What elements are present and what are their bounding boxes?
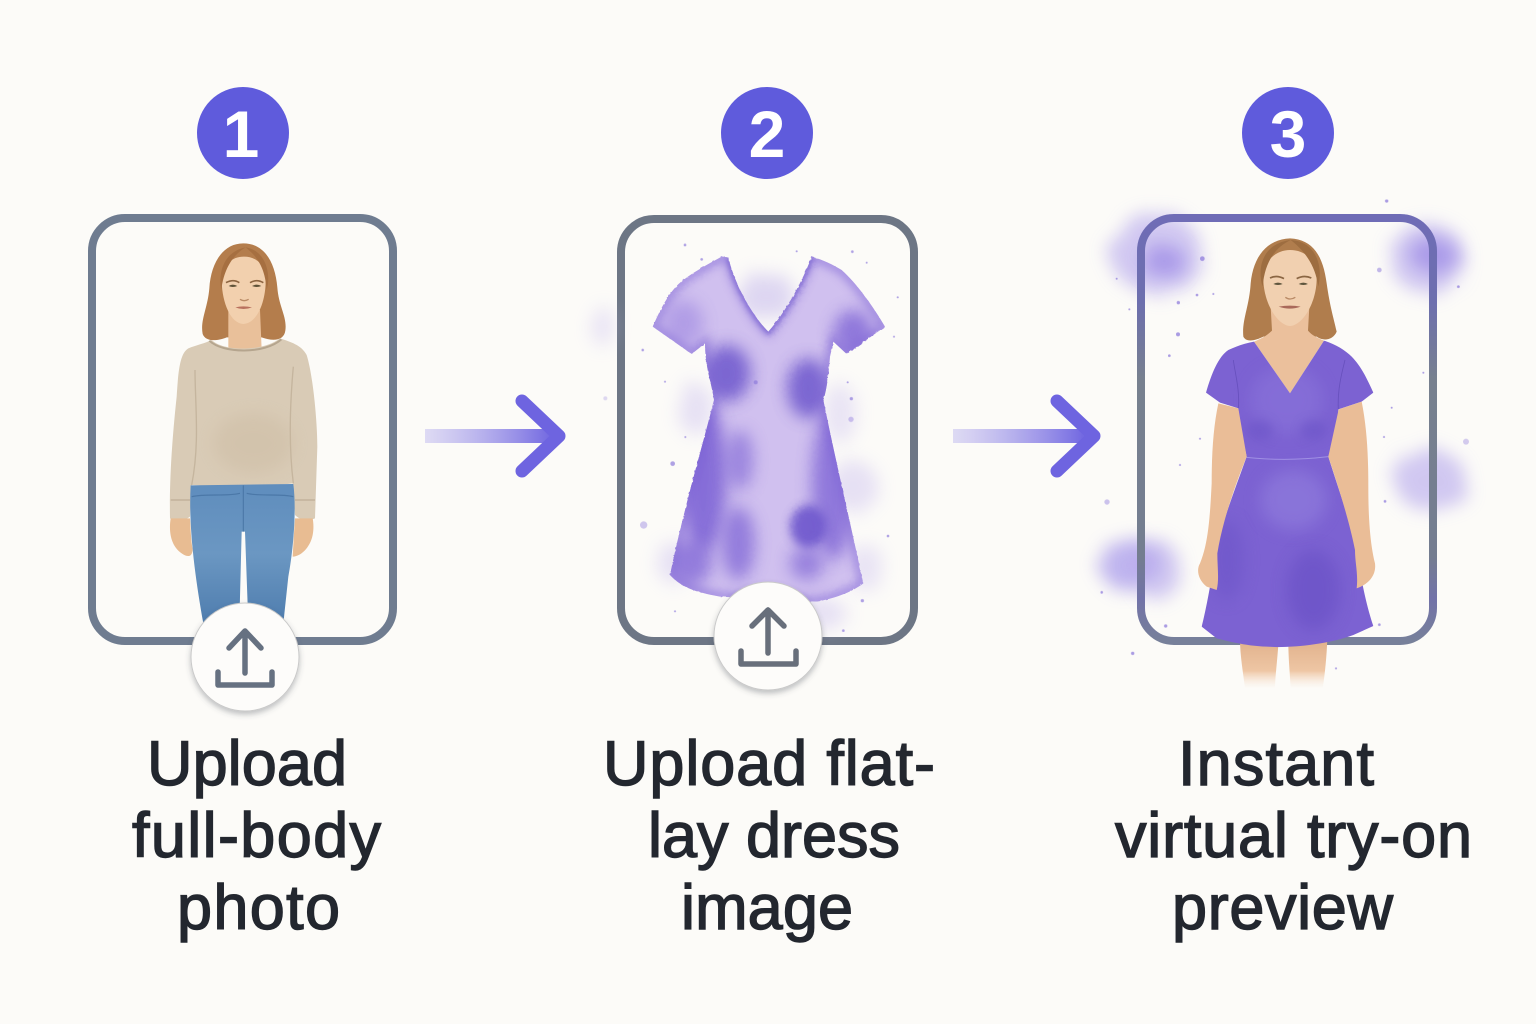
photo frame 2 xyxy=(621,219,914,641)
caption 3: Instant xyxy=(1178,729,1374,799)
icon: upload xyxy=(218,631,272,685)
caption 2: image xyxy=(681,873,853,943)
caption 2 xyxy=(603,729,935,943)
paint splatter xyxy=(1100,199,1469,669)
caption 3: virtual try-on xyxy=(1115,801,1472,871)
caption 3: preview xyxy=(1172,873,1394,943)
step 3 xyxy=(1100,87,1472,943)
illustration: flat-lay watercolor dress xyxy=(592,244,899,632)
arrow 2 xyxy=(953,401,1094,471)
step 2 xyxy=(592,87,935,943)
caption 2: lay dress xyxy=(648,801,900,871)
photo frame 1 xyxy=(92,218,393,641)
number badge 3: 3 xyxy=(1270,97,1306,171)
caption 3 xyxy=(1115,729,1472,943)
number badge 2: 2 xyxy=(749,97,785,171)
arrow 1 xyxy=(425,401,559,471)
paint splatter xyxy=(603,244,899,632)
illustration: woman wearing purple dress xyxy=(1100,199,1469,688)
icon: upload xyxy=(741,610,796,664)
caption 1: Upload xyxy=(147,729,347,799)
number badge 3 xyxy=(1242,87,1334,179)
photo frame 3 xyxy=(1141,218,1433,641)
number badge 1: 1 xyxy=(223,97,259,171)
number badge 1 xyxy=(197,87,289,179)
caption 1 xyxy=(132,729,382,943)
caption 1: photo xyxy=(177,873,340,943)
step 1 xyxy=(92,87,393,943)
caption 1: full-body xyxy=(132,801,382,871)
caption 2: Upload flat- xyxy=(603,729,935,799)
upload button 1 xyxy=(191,603,299,711)
number badge 2 xyxy=(721,87,813,179)
illustration: woman in sweater and jeans xyxy=(170,243,317,623)
watercolor wash behind frame 3 xyxy=(1100,213,1467,600)
upload button 2 xyxy=(714,582,822,690)
